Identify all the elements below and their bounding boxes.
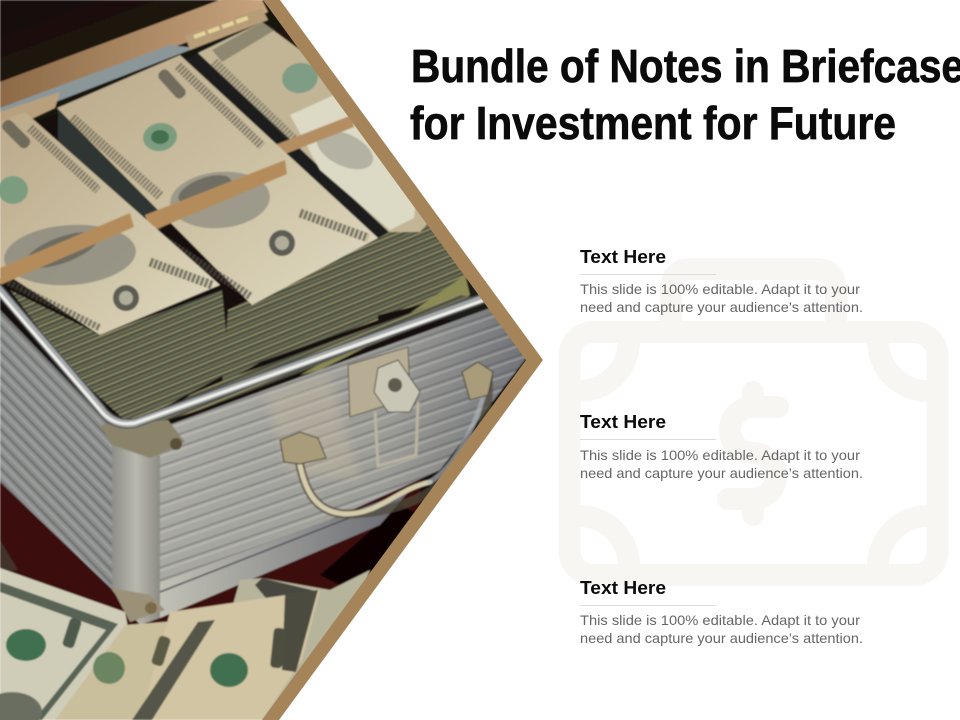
case left face — [0, 310, 115, 592]
right banknote bundle — [185, 22, 470, 316]
text block 1: This slide is 100% editable. Adapt it to your — [580, 281, 860, 297]
text block 2: This slide is 100% editable. Adapt it to your — [580, 447, 860, 463]
case right face — [155, 308, 540, 618]
text block 1: Text Here — [580, 247, 666, 267]
case handle — [280, 362, 493, 514]
middle banknote bundle — [57, 55, 378, 385]
text block 1: need and capture your audience’s attention. — [580, 299, 863, 315]
left banknote bundle — [0, 112, 230, 425]
text block 3: This slide is 100% editable. Adapt it to your — [580, 612, 860, 628]
gold border band — [262, 0, 543, 720]
text block 3 — [580, 578, 863, 646]
loose notes inside case — [300, 275, 470, 375]
text block 3: need and capture your audience’s attention. — [580, 630, 863, 646]
text block 2: Text Here — [580, 412, 666, 432]
photo: briefcase full of banknotes — [0, 0, 540, 720]
title: for Investment for Future — [410, 97, 896, 149]
case corner pillar — [100, 420, 185, 625]
case lock — [348, 347, 420, 466]
case lid frame — [0, 0, 285, 135]
text block 3: Text Here — [580, 578, 666, 598]
banknotes on the floor — [0, 568, 370, 720]
text block 2 — [580, 412, 863, 481]
title — [410, 40, 960, 149]
background icon: money briefcase — [570, 269, 938, 575]
text block 2: need and capture your audience’s attention. — [580, 465, 863, 481]
case rim — [0, 285, 490, 424]
text block 1 — [580, 247, 863, 315]
